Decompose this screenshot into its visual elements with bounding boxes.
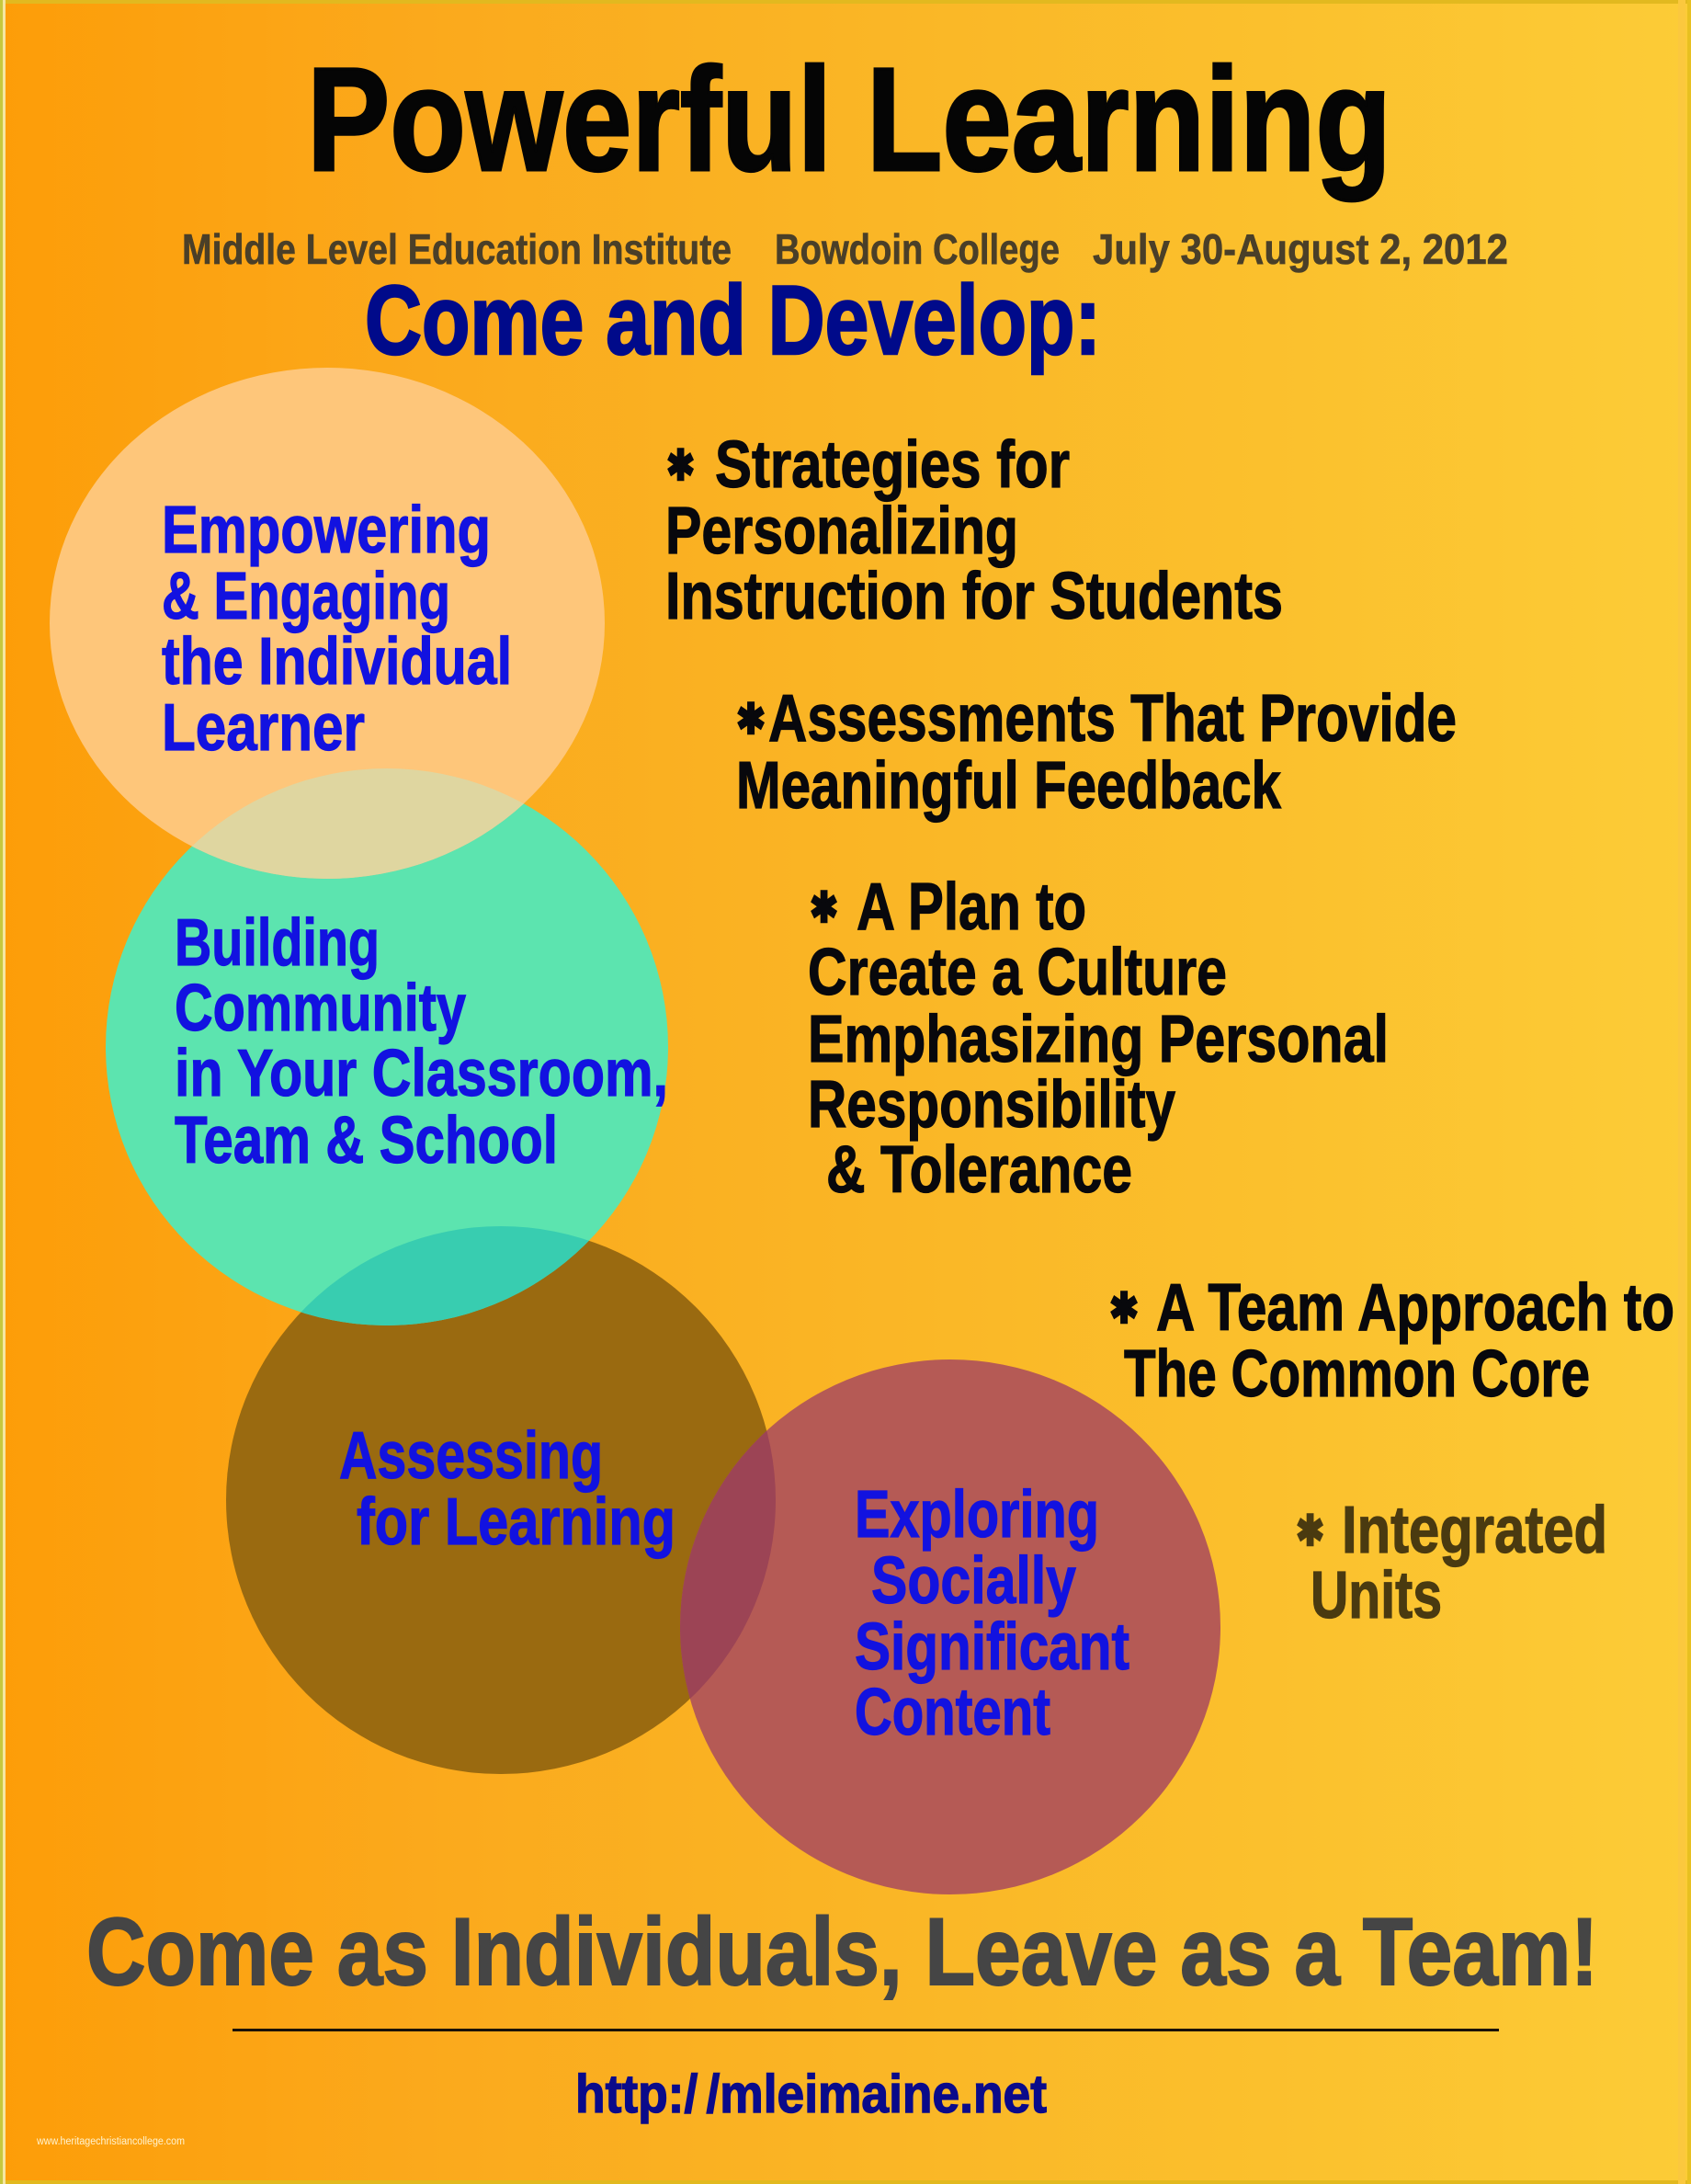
bullet: culture plan: Create a Culture (808, 936, 1227, 1009)
circle label: assessing (339, 1419, 675, 1559)
watermark: www.heritagechristiancollege.com (36, 2136, 185, 2147)
bullet: integrated units (1296, 1494, 1607, 1632)
bullet: culture plan: A Plan to (857, 870, 1086, 944)
circle label: empowering: Empowering (162, 494, 491, 567)
circle label: empowering: & Engaging (162, 560, 450, 633)
event details line: Bowdoin College (775, 225, 1060, 273)
circle label: assessing: for Learning (357, 1485, 675, 1559)
circle label: exploring: Socially (871, 1544, 1076, 1618)
bullet: culture plan: ✱ (810, 882, 838, 932)
bullet: strategies: Personalizing (665, 495, 1018, 568)
overlap: learner and community (192, 768, 524, 879)
bullet: strategies (665, 428, 1283, 633)
bullet: assessments: Assessments That Provide (768, 682, 1457, 756)
event details line: Middle Level Education Institute (182, 225, 732, 273)
bullet: assessments (736, 682, 1457, 823)
circle label: empowering: the Individual (162, 625, 512, 699)
bullet: integrated units: Units (1311, 1559, 1442, 1632)
circle: empowering learner (50, 368, 605, 879)
title: Powerful Learning (307, 37, 1391, 201)
circle label: building community: Team & School (175, 1104, 558, 1177)
circle label: empowering: Learner (162, 691, 365, 765)
heading: come and develop: Come and Develop: (365, 265, 1101, 375)
circle label: empowering (162, 494, 512, 765)
bullet: culture plan: & Tolerance (826, 1133, 1132, 1207)
circle: building community (106, 768, 668, 1325)
bullet: culture plan (808, 870, 1389, 1207)
circle label: exploring: Exploring (855, 1478, 1099, 1552)
event details line (182, 225, 1508, 273)
bullet: team approach: ✱ (1109, 1283, 1139, 1333)
circle label: assessing: Assessing (339, 1419, 603, 1493)
circle label: building community: Community (175, 972, 466, 1045)
bullet: integrated units: ✱ (1296, 1506, 1324, 1555)
overlap: assessing and content (680, 1430, 776, 1699)
website link: http://mleimaine.net (575, 2065, 1047, 2124)
circle label: exploring (855, 1478, 1129, 1749)
bullet: strategies: Strategies for (715, 428, 1070, 502)
circle label: exploring: Significant (855, 1610, 1129, 1684)
circle label: building community (175, 906, 668, 1177)
circle: exploring content (680, 1359, 1220, 1894)
circle label: building community: in Your Classroom, (175, 1037, 668, 1110)
bullet: culture plan: Responsibility (808, 1068, 1175, 1142)
bullet: strategies: Instruction for Students (665, 560, 1283, 633)
bullet: integrated units: Integrated (1342, 1494, 1607, 1567)
bullet: culture plan: Emphasizing Personal (808, 1003, 1389, 1076)
bullet: assessments: Meaningful Feedback (736, 749, 1282, 823)
circle label: building community: Building (175, 906, 380, 980)
bullet: team approach (1109, 1271, 1674, 1411)
bullet: assessments: ✱ (736, 694, 766, 744)
circle label: exploring: Content (855, 1676, 1050, 1749)
circle: assessing for learning (226, 1226, 776, 1774)
bullet: strategies: ✱ (666, 440, 695, 490)
overlap: community and assessing (301, 1226, 589, 1325)
event details line: July 30-August 2, 2012 (1093, 225, 1508, 273)
